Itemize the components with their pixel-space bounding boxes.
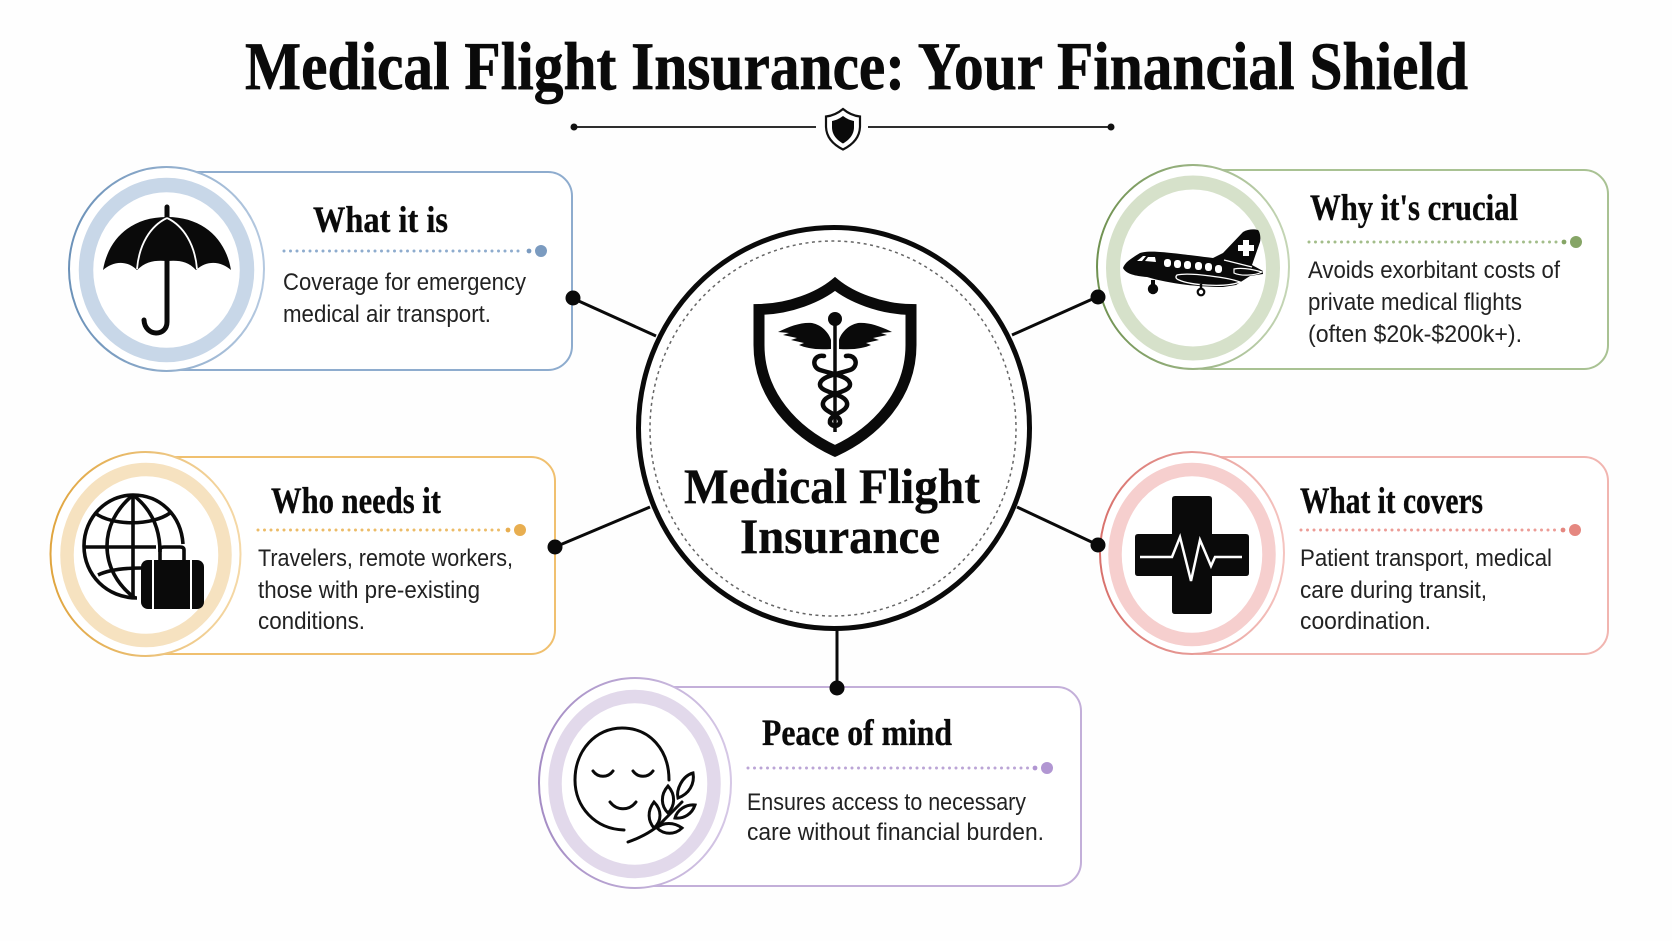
icon: globe and suitcase	[84, 495, 204, 609]
description	[283, 269, 526, 328]
dotted rule	[1301, 524, 1581, 536]
description: Coverage for emergency	[283, 269, 526, 296]
central hub	[638, 228, 1030, 628]
hub label	[684, 458, 980, 564]
icon: small shield	[826, 109, 860, 150]
dotted rule	[748, 762, 1053, 774]
description	[747, 789, 1044, 846]
panel: who needs it	[50, 452, 555, 656]
panel: peace of mind	[539, 678, 1081, 888]
icon: umbrella	[103, 207, 231, 333]
icon: medical plane	[1123, 229, 1263, 295]
title divider with shield	[570, 109, 1114, 150]
description: those with pre-existing	[258, 577, 480, 604]
icon: medical cross with heartbeat	[1135, 496, 1249, 614]
description: care without financial burden.	[747, 819, 1044, 846]
panel: what it is	[69, 167, 572, 371]
description: Travelers, remote workers,	[258, 545, 513, 572]
description: Ensures access to necessary	[747, 789, 1026, 816]
heading: Who needs it	[271, 481, 442, 522]
connector: peace of mind	[830, 630, 844, 696]
connector: what it is	[566, 290, 656, 336]
dotted rule	[1309, 236, 1582, 248]
description	[258, 545, 513, 635]
title: Medical Flight Insurance: Your Financial Shield	[245, 28, 1468, 104]
description: Avoids exorbitant costs of	[1308, 257, 1560, 284]
heading: What it covers	[1300, 481, 1483, 522]
description	[1308, 257, 1560, 348]
description: care during transit,	[1300, 577, 1487, 604]
description: coordination.	[1300, 608, 1431, 635]
panel: why it's crucial	[1097, 165, 1608, 369]
description: (often $20k-$200k+).	[1308, 321, 1522, 348]
dotted rule	[258, 524, 526, 536]
dotted rule	[284, 245, 547, 257]
hub label: Medical Flight	[684, 458, 980, 514]
description: conditions.	[258, 608, 365, 635]
heading: What it is	[313, 200, 448, 241]
description: private medical flights	[1308, 289, 1522, 316]
description: Patient transport, medical	[1300, 545, 1552, 572]
connector: why it's crucial	[1012, 290, 1106, 335]
heading: Why it's crucial	[1310, 188, 1518, 229]
heading: Peace of mind	[762, 713, 952, 754]
description: medical air transport.	[283, 301, 491, 328]
panel: what it covers	[1100, 452, 1608, 654]
description	[1300, 545, 1552, 635]
icon: shield with caduceus	[759, 284, 911, 451]
connector: what it covers	[1017, 507, 1106, 552]
hub label: Insurance	[740, 508, 940, 564]
icon: calm face with leaves	[575, 728, 695, 842]
connector: who needs it	[548, 507, 650, 554]
